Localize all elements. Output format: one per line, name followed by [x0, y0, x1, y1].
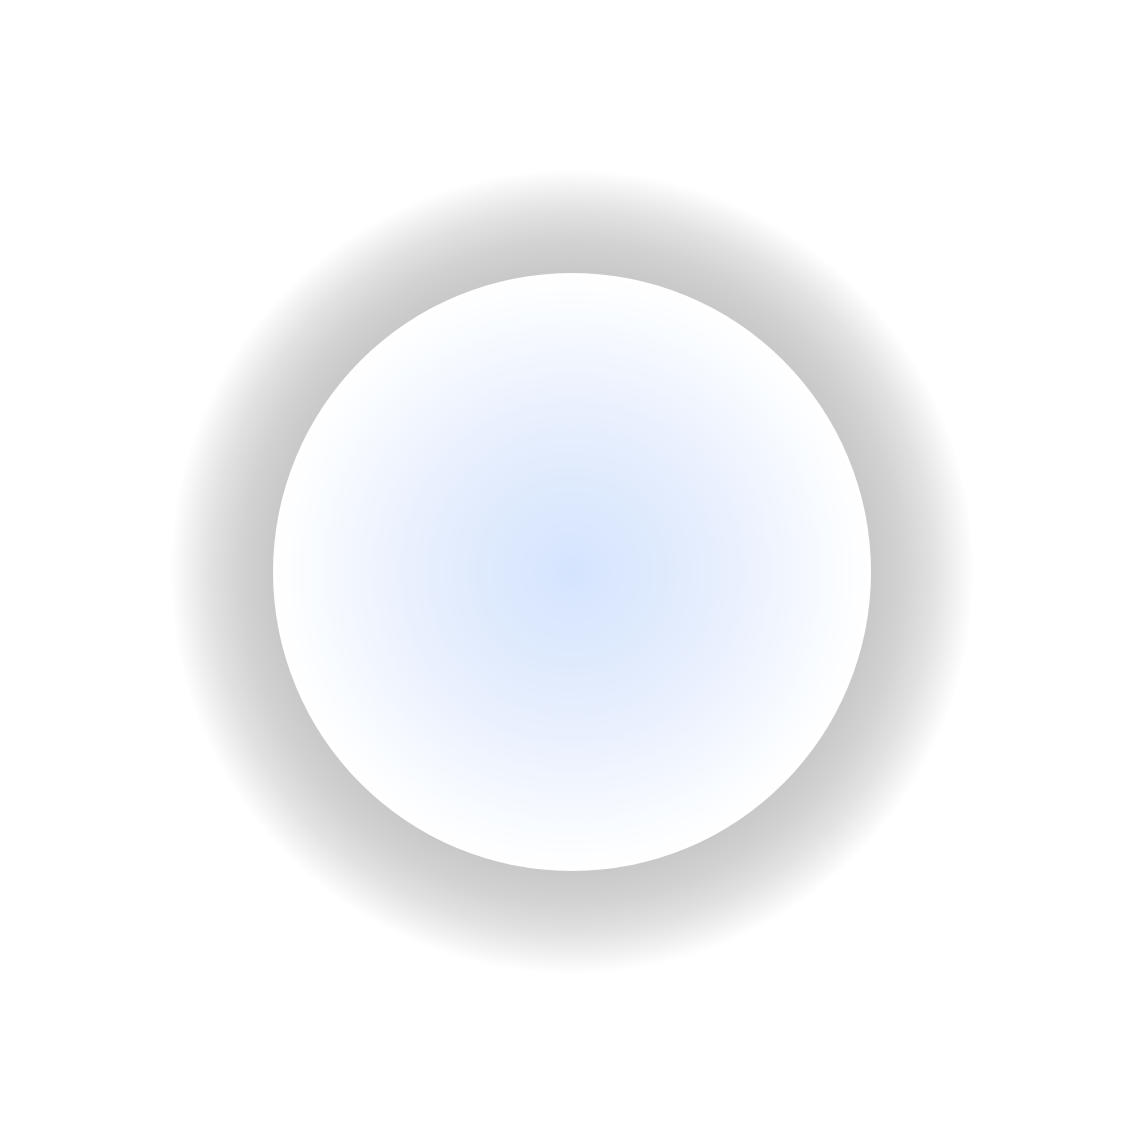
soft shadow halo — [170, 170, 974, 974]
central disc with blue glow — [273, 273, 871, 871]
